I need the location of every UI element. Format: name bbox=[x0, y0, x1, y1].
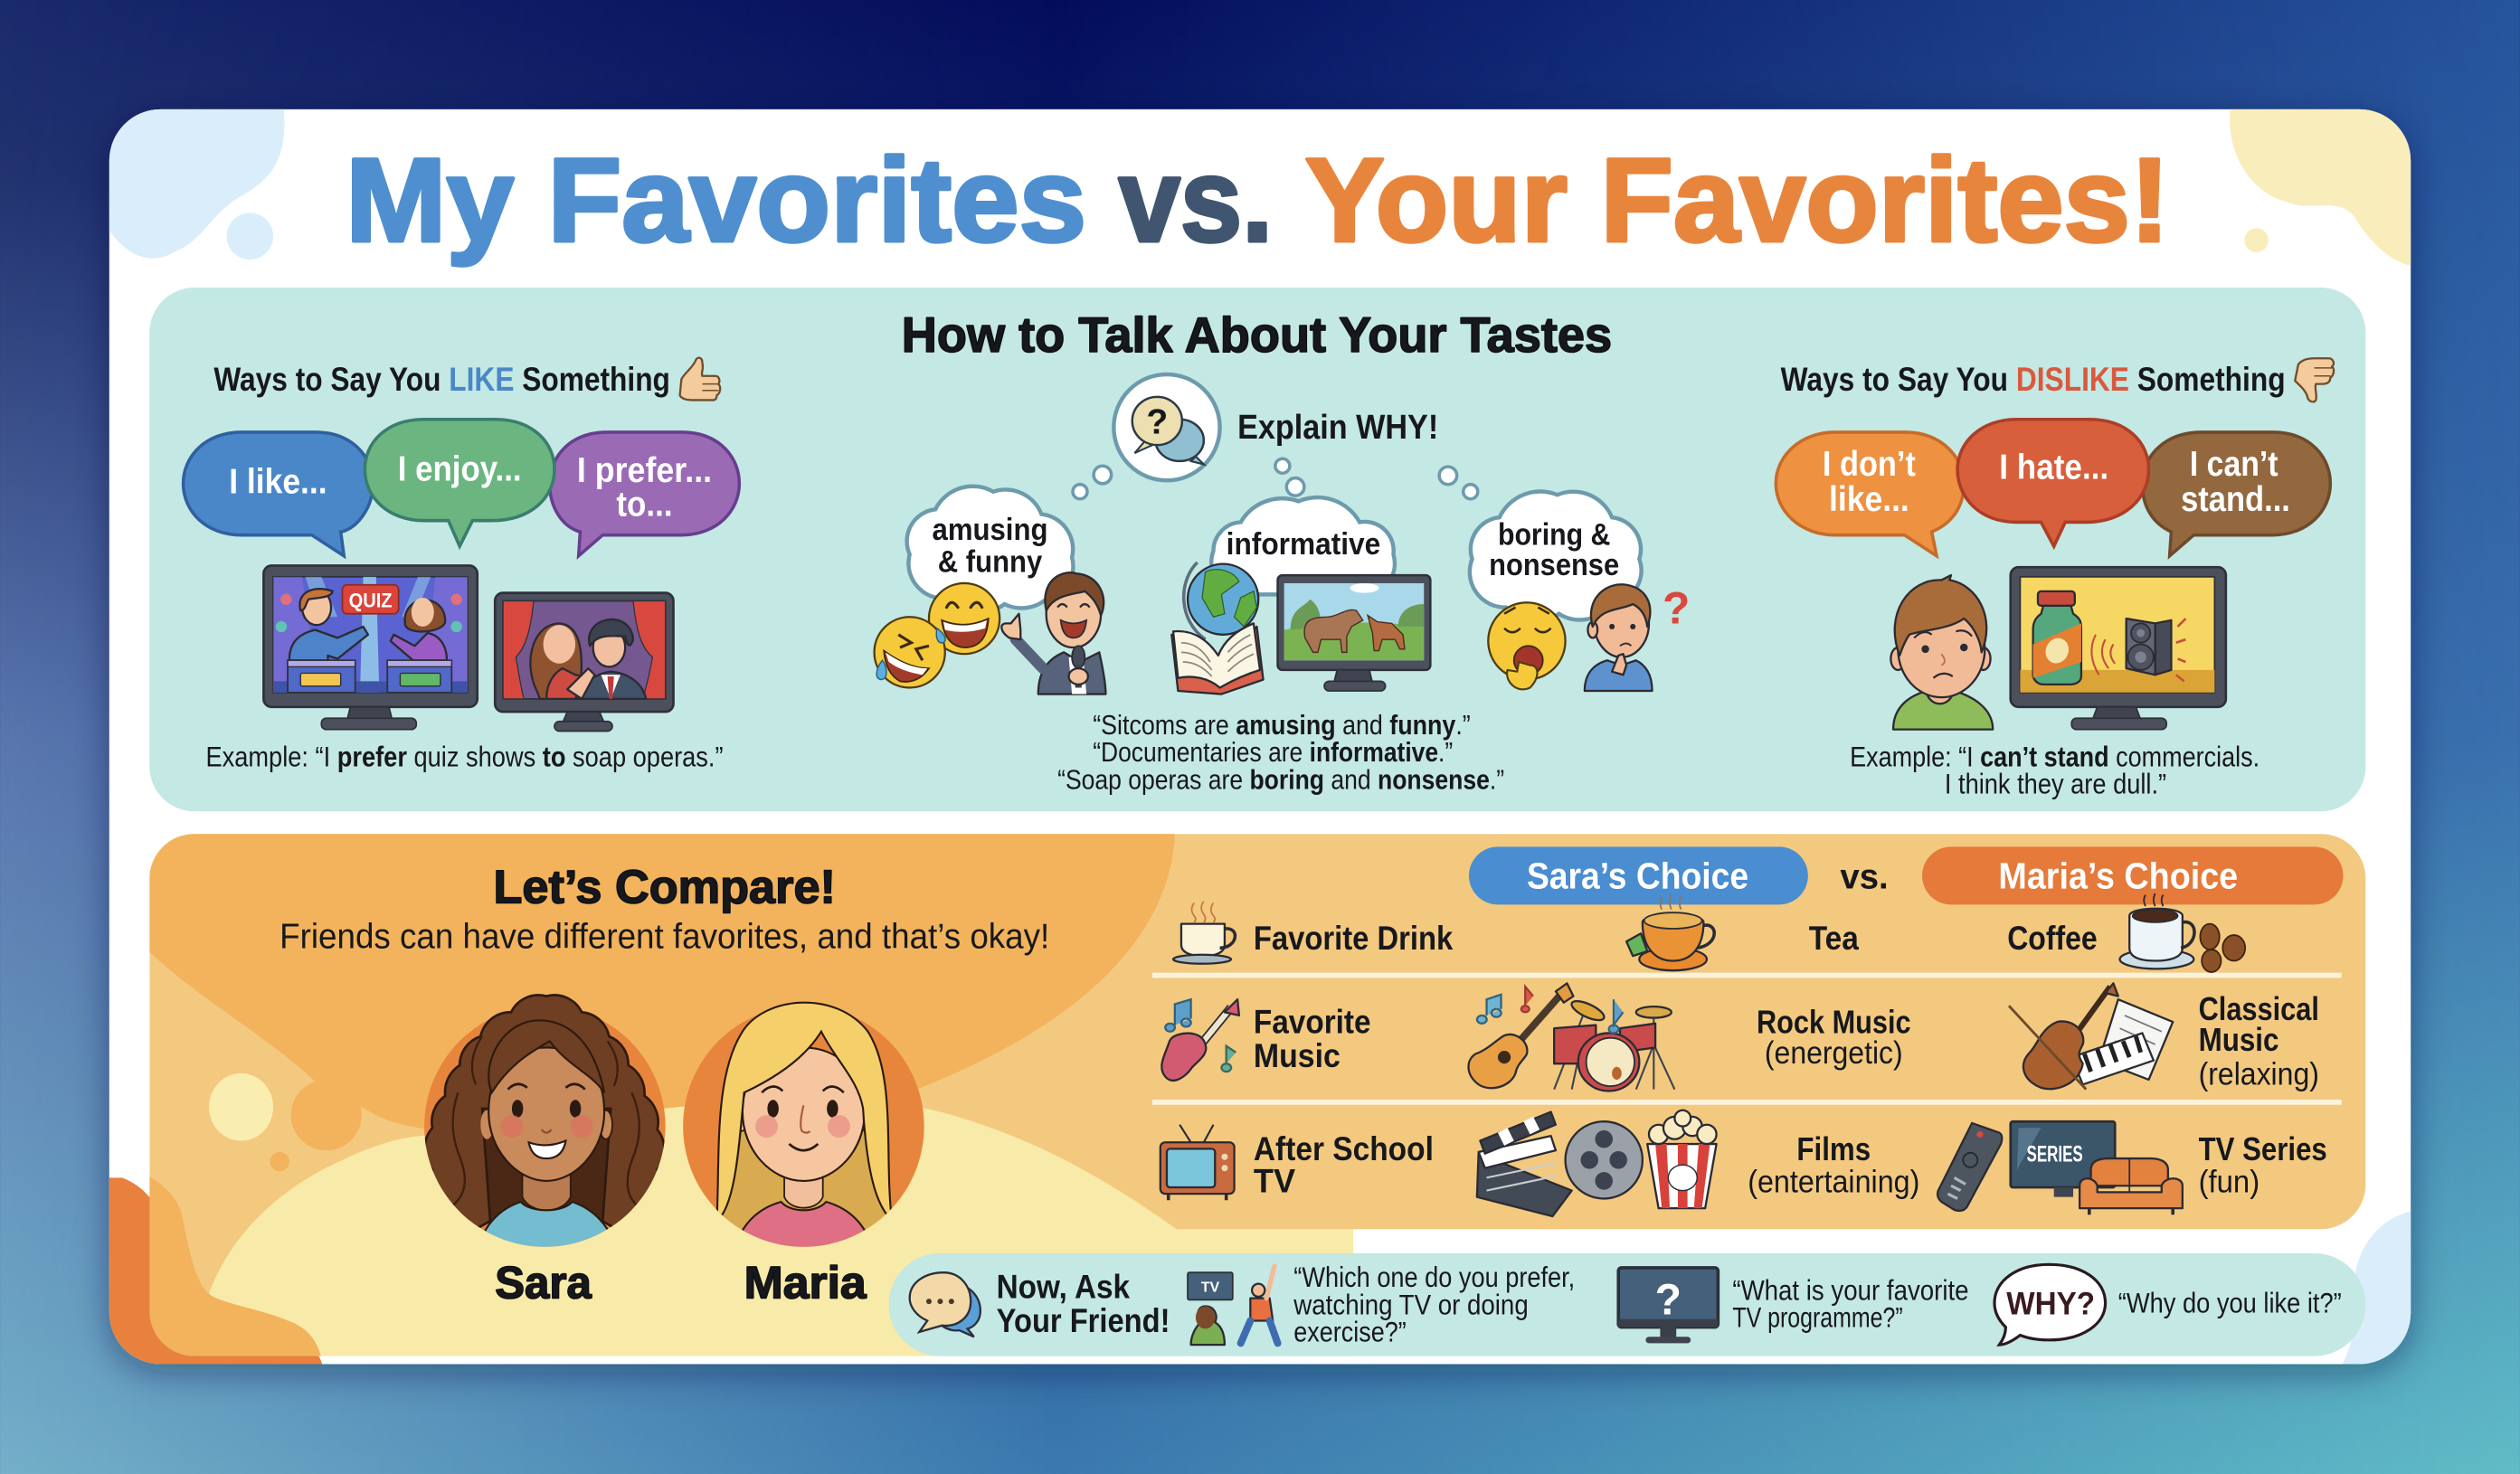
example: dislike: I think they are dull.” bbox=[1945, 769, 2166, 800]
speech bubble: I enjoy bbox=[365, 420, 554, 546]
subheading: like: Ways to Say You LIKE Something bbox=[213, 360, 670, 398]
row: after school tv: TV Series bbox=[2199, 1130, 2327, 1167]
row: favorite drink: Coffee bbox=[2007, 919, 2098, 957]
row: favorite music: Music bbox=[1254, 1036, 1341, 1074]
pill: Sara's choice: Sara’s Choice bbox=[1527, 855, 1748, 897]
icon: question bubbles bbox=[1113, 374, 1220, 480]
row: after school tv: (fun) bbox=[2199, 1163, 2259, 1199]
cloud: boring and nonsense: boring & bbox=[1498, 517, 1610, 552]
icon: monitor with question mark: ? bbox=[1655, 1276, 1682, 1324]
speech bubble: I like: I like... bbox=[229, 462, 327, 501]
heading: now ask your friend: Your Friend! bbox=[997, 1301, 1170, 1339]
speech bubble: I prefer: I prefer... bbox=[577, 451, 712, 490]
row: favorite music: Classical bbox=[2199, 990, 2319, 1027]
row: after school tv: After School bbox=[1254, 1129, 1434, 1167]
avatar: Sara bbox=[424, 995, 666, 1253]
speech bubble: I enjoy: I enjoy... bbox=[398, 449, 522, 488]
row: after school tv: (entertaining) bbox=[1748, 1163, 1919, 1199]
title: Your Favorites! bbox=[1305, 134, 2170, 267]
sign: quiz: QUIZ bbox=[349, 590, 393, 612]
cloud: boring and nonsense bbox=[1470, 492, 1642, 621]
icon: popcorn bbox=[1647, 1110, 1717, 1208]
icon: bottle bbox=[2033, 591, 2081, 685]
row: favorite music: (relaxing) bbox=[2199, 1055, 2319, 1091]
row: favorite music: Rock Music bbox=[1757, 1003, 1911, 1040]
panel: let's compare bbox=[137, 819, 2365, 1382]
person: laughing speaker bbox=[1001, 572, 1105, 694]
icon: series tv and sofa bbox=[2011, 1121, 2183, 1214]
person: thinking boy: ? bbox=[1663, 582, 1690, 633]
cloud: informative bbox=[1211, 497, 1395, 594]
row: favorite music: Music bbox=[2199, 1021, 2278, 1058]
speech bubble: I like bbox=[184, 432, 373, 556]
speech bubble: I don't like: I don’t bbox=[1823, 445, 1916, 484]
tv: quiz show bbox=[263, 565, 478, 730]
icon: cup bbox=[1173, 902, 1235, 964]
row: favorite drink: Favorite Drink bbox=[1254, 919, 1453, 957]
panel background shapes bbox=[137, 819, 2365, 1382]
question: prefer bbox=[1293, 1261, 1575, 1348]
row: favorite drink bbox=[1173, 893, 2245, 972]
speech bubble: I can't stand: I can’t bbox=[2190, 445, 2278, 484]
person: thinking boy bbox=[1585, 582, 1690, 691]
person: sad boy bbox=[1890, 575, 1993, 730]
icon: why bubble bbox=[1994, 1264, 2106, 1345]
cloud: amusing and funny: & funny bbox=[938, 545, 1043, 580]
speech bubble: I hate: I hate... bbox=[1999, 448, 2108, 487]
icon: film reel bbox=[1566, 1121, 1643, 1198]
icon: drums bbox=[1554, 997, 1674, 1091]
quotes: explain why examples: “Soap operas are boring and nonsense.” bbox=[1057, 765, 1504, 795]
subheading: friends: Friends can have different favorites, and that’s okay! bbox=[279, 917, 1049, 956]
icon: remote bbox=[1937, 1123, 2002, 1211]
heading: now ask your friend bbox=[997, 1268, 1170, 1339]
panel: now ask your friend bbox=[889, 1253, 2365, 1356]
icon: thumbs down bbox=[2295, 358, 2334, 402]
icon: open book bbox=[1171, 623, 1264, 694]
icon: laughing emoji bbox=[875, 583, 999, 687]
tv: soap opera bbox=[495, 593, 673, 731]
explain why bbox=[1113, 374, 1438, 480]
icon: chat bubbles bbox=[910, 1272, 981, 1337]
icon: why bubble: WHY? bbox=[2006, 1285, 2095, 1321]
label: Sara: Sara bbox=[495, 1258, 592, 1309]
comparison table bbox=[1152, 846, 2344, 1216]
icon: clapperboard bbox=[1477, 1112, 1572, 1216]
avatar: Maria bbox=[683, 1003, 924, 1253]
cloud: amusing and funny bbox=[907, 487, 1073, 612]
label: Maria: Maria bbox=[744, 1258, 867, 1309]
quotes: explain why examples bbox=[1057, 711, 1504, 795]
explain why: Explain WHY! bbox=[1237, 408, 1438, 447]
label: vs: vs. bbox=[1840, 858, 1889, 897]
icon: retro tv bbox=[1161, 1125, 1235, 1200]
panel: how to talk about your tastes bbox=[149, 288, 2365, 811]
tv: wildlife documentary bbox=[1278, 575, 1430, 691]
heading: let's compare: Let’s Compare! bbox=[493, 861, 836, 913]
cloud: informative: informative bbox=[1227, 527, 1380, 562]
speech bubble: I prefer bbox=[550, 432, 739, 556]
row: favorite music bbox=[1161, 983, 2319, 1091]
question: favorite tv programme bbox=[1732, 1274, 1969, 1334]
icon: speaker bbox=[2127, 619, 2171, 675]
icon: question bubbles: ? bbox=[1146, 403, 1168, 442]
row: favorite music: (energetic) bbox=[1765, 1035, 1903, 1071]
title: My Favorites bbox=[346, 134, 1086, 267]
icon: acoustic guitar bbox=[1468, 983, 1573, 1088]
question: favorite tv programme: “What is your favorite bbox=[1732, 1274, 1969, 1306]
cloud: amusing and funny: amusing bbox=[933, 513, 1047, 547]
speech bubble: I don't like bbox=[1776, 432, 1964, 556]
row: favorite drink: Tea bbox=[1809, 919, 1859, 957]
speech bubble: I can't stand: stand... bbox=[2181, 480, 2290, 519]
icon: tea bbox=[1626, 895, 1714, 970]
icon: tv and exercise: TV bbox=[1201, 1280, 1219, 1296]
pill: Sara's choice bbox=[1469, 846, 1808, 904]
row: after school tv: TV bbox=[1254, 1161, 1295, 1199]
example: like: Example: “I prefer quiz shows to soap operas.” bbox=[205, 742, 724, 773]
question: prefer: exercise?” bbox=[1293, 1317, 1407, 1348]
icon: series tv and sofa: SERIES bbox=[2027, 1142, 2083, 1167]
title bbox=[346, 134, 2170, 267]
question: prefer: watching TV or doing bbox=[1293, 1289, 1529, 1320]
example: dislike bbox=[1850, 742, 2259, 800]
thought dots bbox=[1073, 458, 1478, 499]
icon: yawning emoji bbox=[1488, 602, 1566, 689]
icon: coffee bbox=[2120, 893, 2245, 972]
question: favorite tv programme: TV programme?” bbox=[1732, 1302, 1903, 1334]
icon: globe bbox=[1184, 562, 1258, 639]
speech bubble: I prefer: to... bbox=[616, 485, 673, 524]
question: prefer: “Which one do you prefer, bbox=[1293, 1261, 1575, 1293]
icon: sheet music and piano bbox=[2071, 999, 2173, 1084]
cloud: boring and nonsense: nonsense bbox=[1489, 548, 1619, 582]
title: vs. bbox=[1119, 134, 1273, 267]
row: after school tv: Films bbox=[1796, 1130, 1871, 1167]
heading: now ask your friend: Now, Ask bbox=[997, 1268, 1130, 1306]
icon: electric guitar bbox=[1161, 999, 1239, 1081]
speech bubble: I hate bbox=[1957, 420, 2149, 546]
pill: Maria's choice bbox=[1922, 846, 2344, 904]
subheading: dislike: Ways to Say You DISLIKE Something bbox=[1781, 360, 2286, 398]
icon: thumbs up bbox=[680, 358, 720, 400]
speech bubble: I can't stand bbox=[2142, 432, 2330, 556]
question: why do you like it: “Why do you like it?” bbox=[2118, 1288, 2342, 1319]
icon: tv and exercise bbox=[1188, 1266, 1278, 1345]
pill: Maria's choice: Maria’s Choice bbox=[1998, 855, 2238, 897]
quotes: explain why examples: “Sitcoms are amusing and funny.” bbox=[1093, 711, 1471, 741]
sign: quiz bbox=[342, 585, 399, 614]
white card bbox=[109, 109, 2411, 1364]
row: after school tv bbox=[1161, 1110, 2327, 1216]
example: dislike: Example: “I can’t stand commercials. bbox=[1850, 742, 2259, 773]
quotes: explain why examples: “Documentaries are informative.” bbox=[1093, 738, 1453, 768]
speech bubble: I don't like: like... bbox=[1829, 480, 1909, 519]
tv: commercial bbox=[2011, 567, 2226, 730]
row: favorite music: Favorite bbox=[1254, 1002, 1371, 1040]
icon: monitor with question mark bbox=[1618, 1268, 1718, 1343]
heading: how to talk: How to Talk About Your Tastes bbox=[902, 307, 1612, 363]
icon: violin bbox=[2009, 983, 2118, 1090]
